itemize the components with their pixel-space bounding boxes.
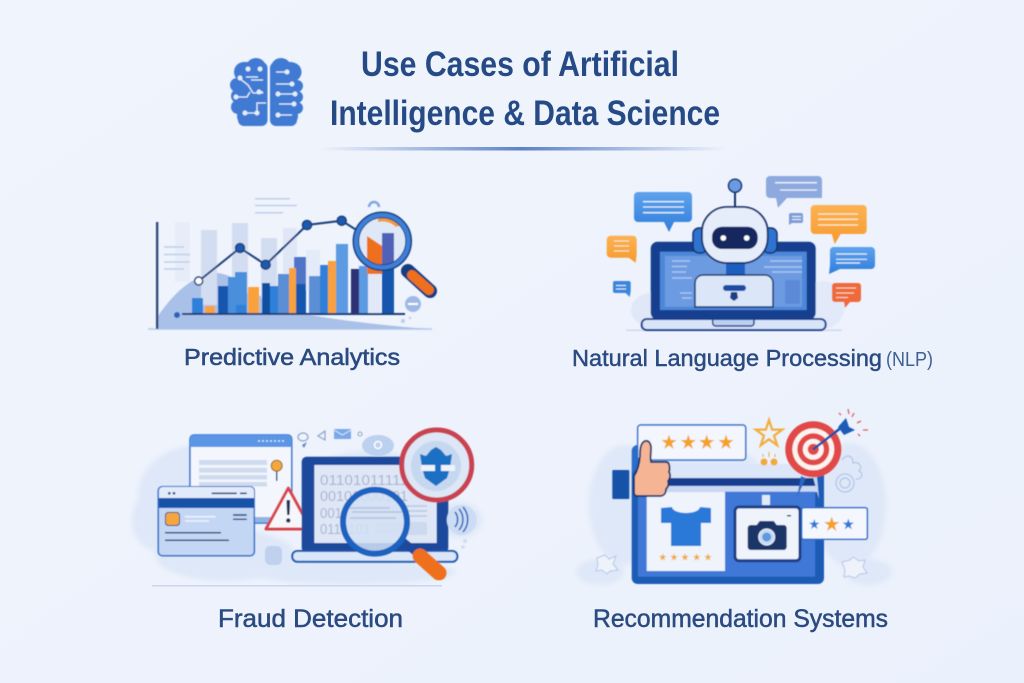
title bbox=[330, 45, 720, 133]
chat bubble: large blue bbox=[634, 192, 692, 232]
icon: circuit brain bbox=[230, 58, 303, 126]
chat bubble: red orange bbox=[832, 283, 861, 308]
icon: magnifier bbox=[343, 490, 439, 573]
rating card: mixed stars bbox=[802, 508, 867, 539]
icon: target with arrow bbox=[785, 409, 868, 499]
illustration: windows, alert, laptop and magnifier bbox=[132, 429, 482, 586]
product: camera card bbox=[735, 507, 800, 561]
laptop with binary code: 00101000101 bbox=[320, 489, 408, 505]
window: back browser bbox=[190, 435, 292, 523]
icon: sound waves bbox=[447, 505, 477, 535]
panel: fraud detection bbox=[132, 429, 482, 633]
label: natural language processing: Natural Language Processing bbox=[572, 345, 882, 371]
robot bbox=[693, 179, 777, 307]
chat bubble: right blue bbox=[829, 247, 875, 274]
screen frame bbox=[632, 445, 824, 584]
window: front form bbox=[158, 487, 254, 556]
laptop with binary code: 001 bbox=[320, 506, 342, 522]
icon: magnifier over chart bbox=[353, 202, 430, 291]
laptop with binary code: 01101011111 bbox=[320, 473, 408, 489]
chat bubble: left orange bbox=[607, 236, 637, 263]
label: predictive analytics: Predictive Analytics bbox=[184, 344, 400, 370]
laptop with binary code: 0110101 bbox=[320, 522, 370, 538]
illustration: storefront, ratings and target bbox=[576, 409, 892, 585]
label: fraud detection: Fraud Detection bbox=[218, 605, 403, 633]
icon: red shield badge bbox=[402, 430, 472, 500]
laptop with binary code bbox=[292, 457, 457, 562]
gear outline bbox=[836, 456, 862, 492]
laptop bbox=[642, 242, 826, 330]
icon: outline star bbox=[756, 420, 782, 466]
illustration: robot on laptop with chat bubbles bbox=[607, 176, 875, 331]
icon: warning triangle bbox=[266, 488, 311, 529]
chat bubble: small periwinkle bbox=[789, 213, 803, 225]
flake doodle: left bbox=[596, 555, 618, 574]
icon: thumbs up bbox=[612, 441, 670, 499]
chat bubble: large orange bbox=[811, 205, 867, 244]
flake doodle: right bbox=[842, 557, 867, 578]
title: Use Cases of Artificial bbox=[361, 45, 679, 84]
chat bubble: small blue bbox=[613, 281, 631, 297]
title: Intelligence & Data Science bbox=[330, 94, 720, 133]
small floating icons bbox=[298, 429, 394, 456]
panel: natural language processing bbox=[572, 176, 933, 371]
label: NLP: (NLP) bbox=[886, 349, 933, 371]
rating card: four stars bbox=[638, 425, 746, 460]
label: recommendation systems: Recommendation Systems bbox=[593, 605, 888, 633]
panel: predictive analytics bbox=[148, 199, 432, 370]
panel: recommendation systems bbox=[576, 409, 892, 633]
chart: bars, trend line and magnifier bbox=[148, 199, 432, 330]
chat bubble: periwinkle bbox=[766, 176, 822, 208]
divider bbox=[320, 147, 725, 150]
product: t-shirt with stars bbox=[659, 507, 712, 561]
